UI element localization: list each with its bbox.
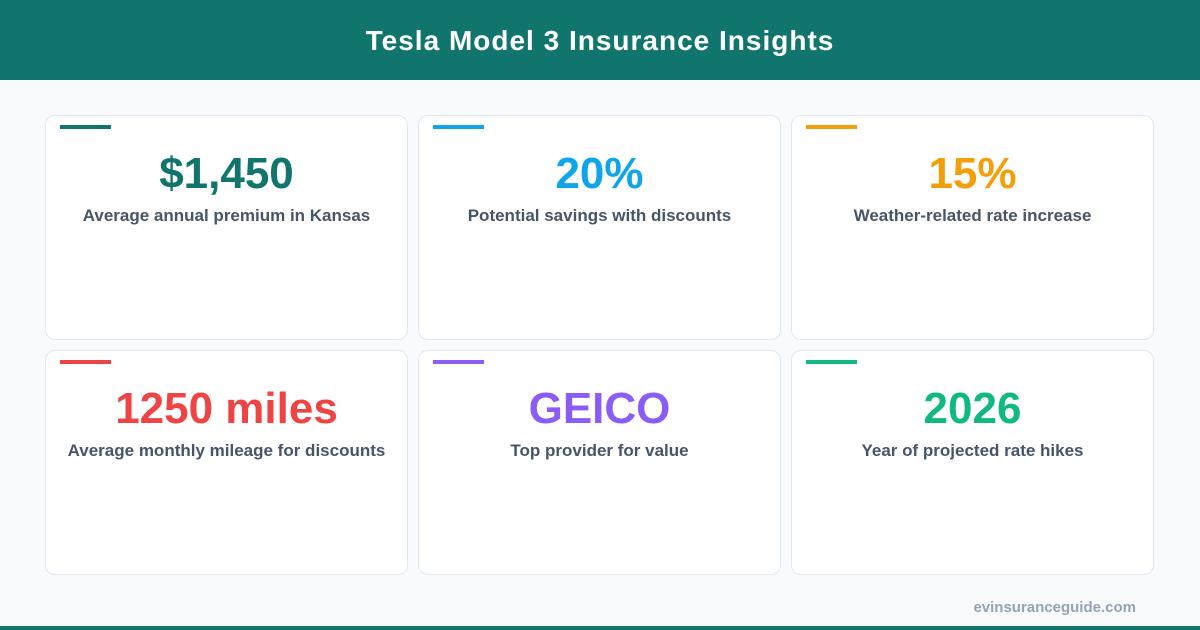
card: provider: Top provider for value [510,441,689,460]
card: mileage [45,350,408,575]
title [0,0,1200,80]
card: savings [418,115,781,340]
footer source: evinsuranceguide.com [973,599,1136,616]
card: year: Year of projected rate hikes [861,441,1084,460]
card: premium [45,115,408,340]
card: year [791,350,1154,575]
card: weather: Weather-related rate increase [854,206,1091,225]
card: weather [791,115,1154,340]
card: premium: Average annual premium in Kansas [83,206,370,225]
card: mileage: 1250 miles [115,384,338,433]
card: savings: 20% [555,149,644,198]
card: year: 2026 [924,384,1021,433]
card: provider [418,350,781,575]
card: provider: GEICO [529,384,670,433]
card: savings: Potential savings with discounts [468,206,731,225]
card: premium: $1,450 [159,149,294,198]
card: mileage: Average monthly mileage for discounts [68,441,385,460]
card: weather: 15% [928,149,1017,198]
title: Tesla Model 3 Insurance Insights [366,25,834,56]
